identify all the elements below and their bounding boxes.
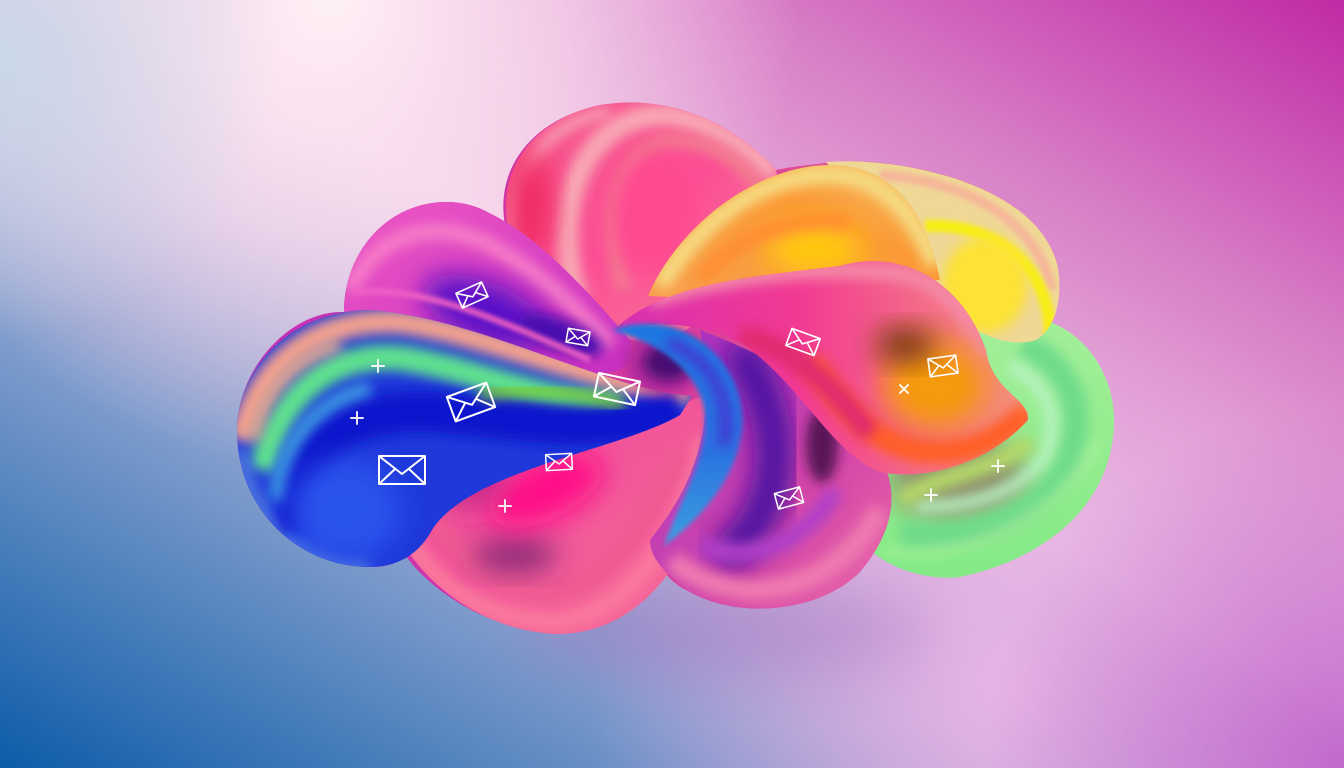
ribbon: blue swirl bbox=[612, 324, 742, 546]
lobe: centre purple bbox=[650, 330, 892, 609]
lobe: yellow bbox=[826, 161, 1060, 342]
sparkles bbox=[351, 360, 1004, 512]
envelope 7 bbox=[379, 456, 425, 484]
lobe: top pink bbox=[506, 102, 777, 340]
envelope icons bbox=[379, 282, 958, 509]
lobe: upper magenta bbox=[344, 202, 632, 374]
lobe: bottom pink bbox=[410, 398, 705, 634]
lobe: green right bbox=[874, 322, 1114, 578]
soft shadow beneath cloud bbox=[510, 585, 930, 675]
lobe: rainbow left bbox=[230, 300, 700, 575]
envelope 4 bbox=[928, 355, 958, 377]
envelope 5 bbox=[594, 373, 640, 405]
lobe: right pink and orange bbox=[612, 261, 1028, 474]
envelope 2 bbox=[566, 328, 590, 346]
swirling rainbow cloud bbox=[230, 90, 1120, 640]
cloud silhouette base bbox=[237, 103, 1059, 634]
envelope 6 bbox=[447, 383, 495, 421]
swirl centre bbox=[625, 330, 705, 394]
envelope 3 bbox=[786, 328, 820, 356]
envelope 1 bbox=[456, 282, 488, 308]
lobe: orange bbox=[648, 165, 940, 297]
envelope 9 bbox=[774, 487, 804, 509]
envelope 8 bbox=[546, 453, 572, 471]
